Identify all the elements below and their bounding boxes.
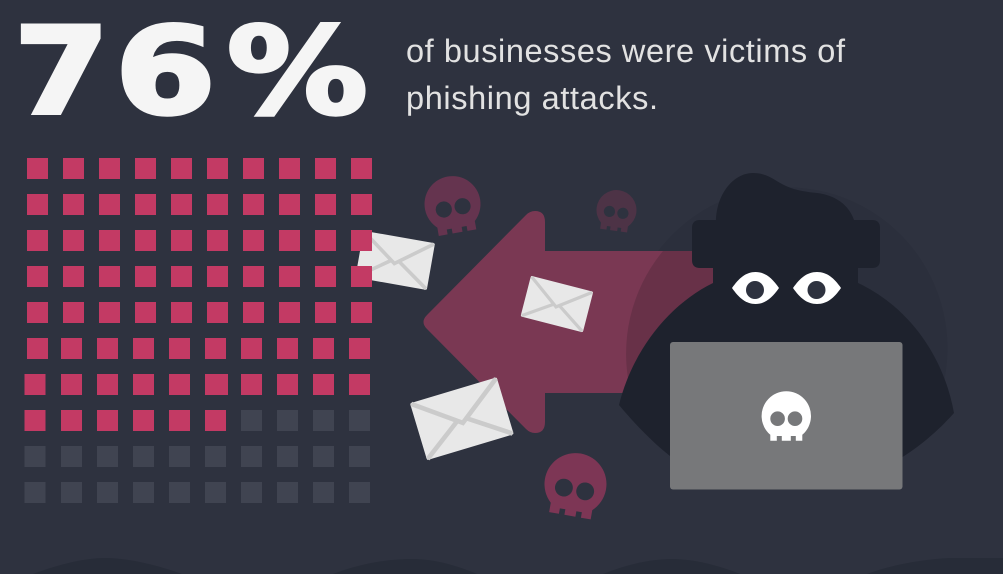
title: 76%: 7 [14,3,109,142]
icon: skull upper left [420,172,485,238]
envelope: on arrow [521,276,593,332]
text block: description: of businesses were victims of [406,33,846,69]
background mounds [33,558,1003,574]
progress grid: 76 of 100 squares [24,158,372,503]
text block: description [406,33,846,116]
arrow pointing left [424,211,715,433]
envelope: large lower [410,377,514,460]
icon: skull bottom [539,448,611,521]
right eye [793,272,841,304]
hacker figure [619,173,954,470]
title: 76% [14,3,368,142]
icon: white skull on laptop [762,391,811,441]
text block: description: phishing attacks. [406,80,658,116]
laptop [670,342,902,490]
envelope: top left [355,231,435,290]
title: 76%: % [227,3,368,142]
left eye [732,272,779,304]
title: 76%: 6 [115,3,216,142]
halo circle behind hacker [626,187,948,408]
icon: skull upper small [594,187,639,233]
